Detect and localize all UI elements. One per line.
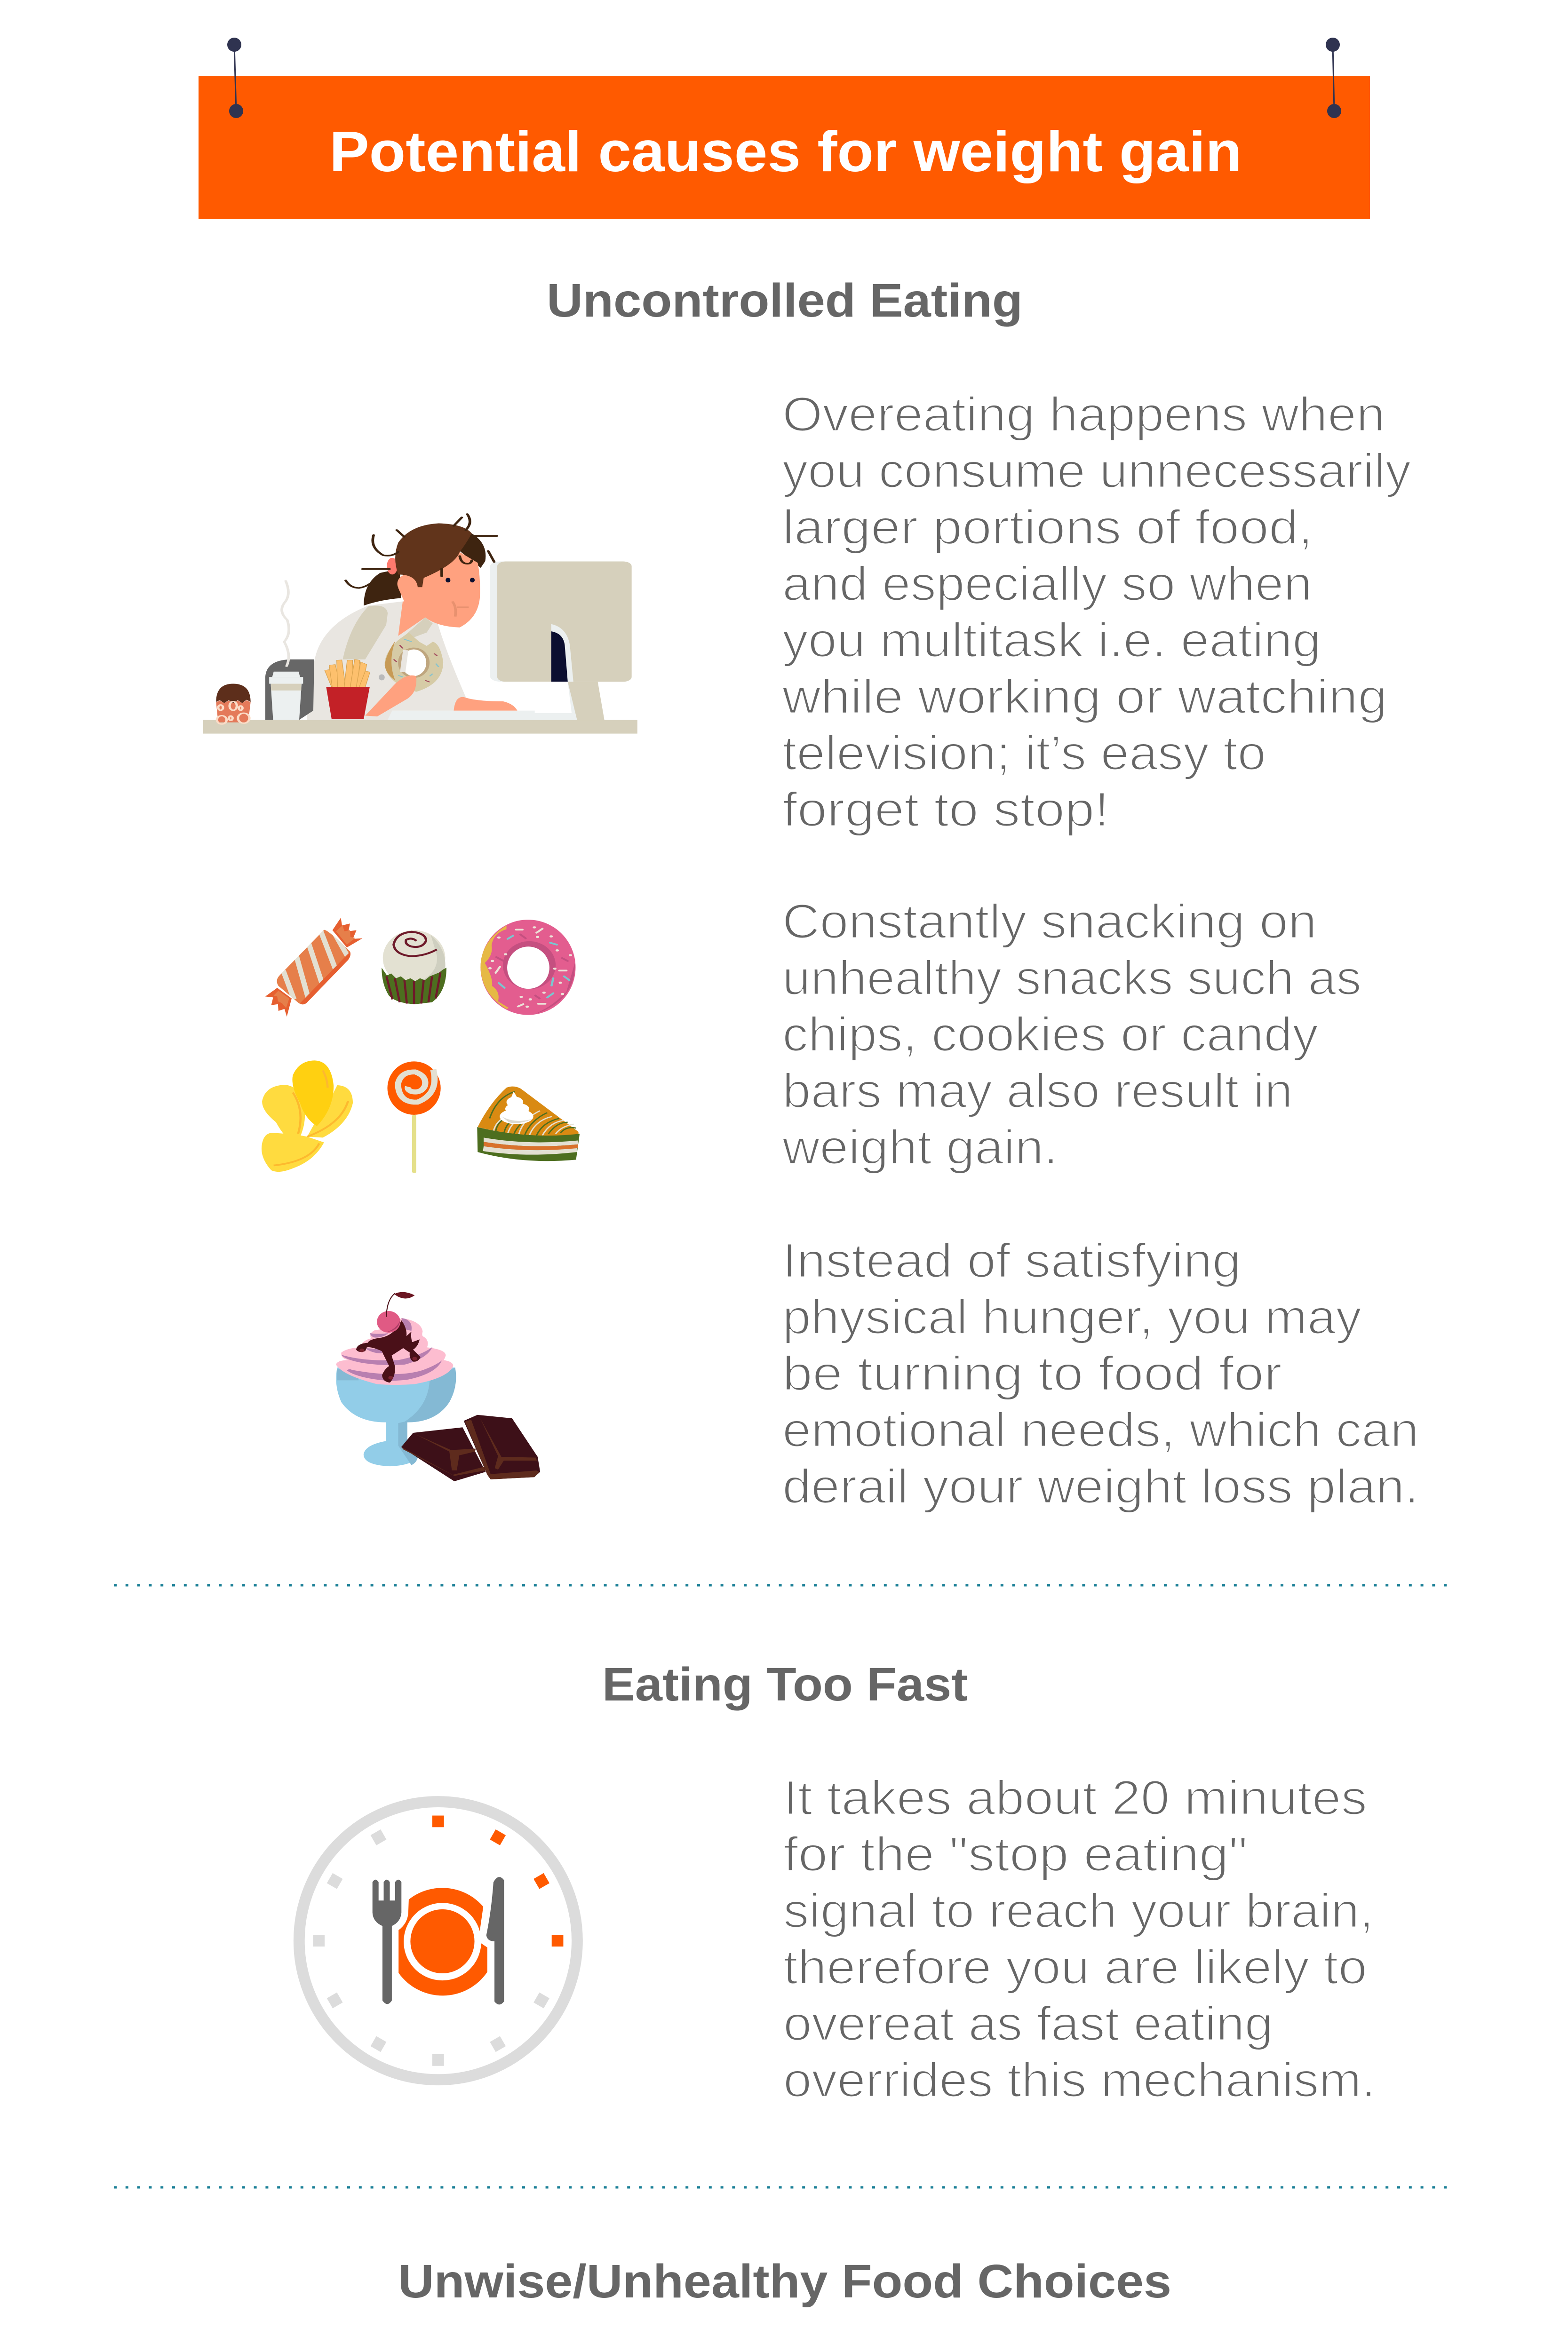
title: Potential causes for weight gain [329,119,1242,183]
illustration: woman overeating at computer [203,514,637,734]
lollipop [387,1061,441,1173]
title banner [199,38,1370,219]
text: emotional eating: be turning to food for [782,1346,1282,1400]
banner pin right [1326,38,1341,118]
eyes and mouth [446,578,475,617]
hair [395,523,472,587]
muffin [216,684,251,724]
ice cream [336,1318,453,1385]
text: eating too fast: overeat as fast eating [783,1996,1273,2050]
chocolate pieces [401,1415,540,1481]
cream swirl [500,1091,534,1124]
text: overeating [782,387,1411,836]
hand with donut [365,675,416,716]
collar [407,617,433,637]
plate [398,1888,487,1995]
banner pin left [227,38,243,118]
text: eating too fast: It takes about 20 minutes [783,1771,1367,1825]
knife [486,1877,504,2004]
text: emotional eating: Instead of satisfying [782,1233,1241,1287]
text: emotional eating: physical hunger, you may [782,1290,1362,1344]
fries [325,660,370,719]
text: overeating: and especially so when [782,556,1312,611]
text: overeating: forget to stop! [782,782,1109,836]
ear [398,574,420,594]
text: overeating: you multitask i.e. eating [782,613,1321,667]
text: overeating: Overeating happens when [782,387,1385,441]
takeaway bag [265,660,314,720]
text: overeating: larger portions of food, [782,500,1313,554]
text: snacking: chips, cookies or candy [782,1007,1319,1061]
coat [307,602,472,720]
text: overeating: television; it’s easy to [782,726,1266,780]
ponytail [364,569,401,605]
text: snacking: unhealthy snacks such as [782,951,1361,1005]
bitten donut [385,633,443,692]
clock ring [299,1802,577,2080]
desk [203,720,637,734]
face [398,548,480,636]
icon: clock with plate and cutlery [299,1802,577,2080]
cake slice [477,1087,580,1161]
text: eating too fast [783,1771,1376,2107]
text: snacking [782,894,1361,1174]
pink donut [480,920,575,1015]
illustration: snacks [262,918,580,1173]
text: eating too fast: signal to reach your brain, [783,1883,1374,1938]
text: overeating: you consume unnecessarily [782,444,1411,498]
potato chips [262,1060,353,1172]
back hair [460,532,486,568]
text: emotional eating: derail your weight loss plan. [782,1459,1419,1513]
text: snacking: bars may also result in [782,1064,1293,1118]
text: eating too fast: for the "stop eating" [783,1827,1248,1881]
candy [265,918,362,1017]
cherry [377,1292,415,1333]
keyboard [388,711,577,720]
steam [282,581,289,666]
text: emotional eating [782,1233,1419,1513]
heading: unwise food choices: Unwise/Unhealthy Food Choices [398,2255,1171,2308]
coffee cup [269,672,303,720]
text: snacking: weight gain. [782,1120,1058,1174]
text: eating too fast: therefore you are likely to [783,1940,1367,1994]
text: snacking: Constantly snacking on [782,894,1317,948]
sundae glass [336,1367,456,1466]
heading: eating too fast: Eating Too Fast [602,1658,968,1711]
text: eating too fast: overrides this mechanism. [783,2053,1376,2107]
truffle [382,930,446,1004]
hair strands [346,514,497,588]
text: emotional eating: emotional needs, which can [782,1403,1419,1457]
text: overeating: while working or watching [782,669,1387,723]
heading: uncontrolled eating: Uncontrolled Eating [547,274,1023,327]
illustration: sundae and chocolate [336,1292,540,1481]
hair tie [387,558,398,574]
chocolate sauce [356,1320,421,1383]
fork [373,1880,401,2004]
computer monitor [398,562,632,720]
clock ticks [313,1816,563,2066]
hand on keyboard [454,697,517,711]
